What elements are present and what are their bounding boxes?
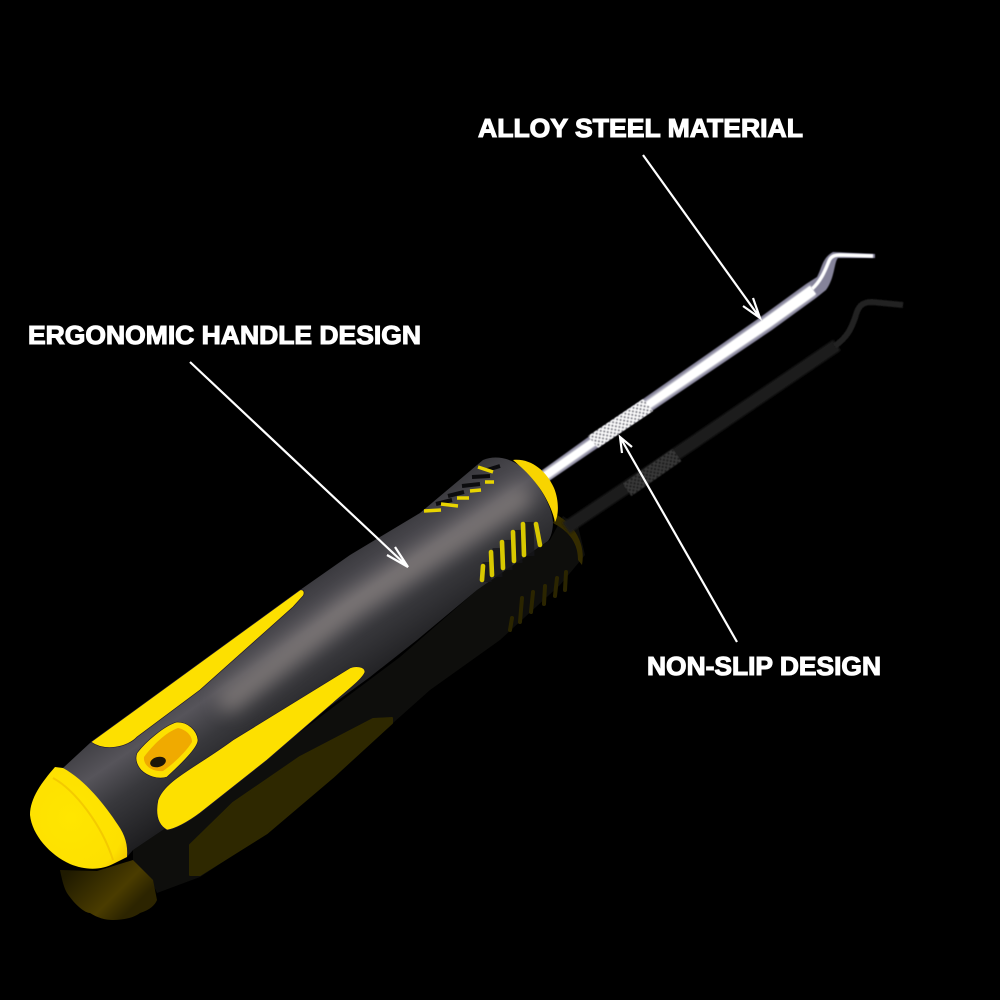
hanging hole bbox=[136, 722, 198, 778]
screwdriver handle bbox=[30, 458, 558, 869]
reflected shaft bbox=[566, 345, 837, 528]
reflected end cap bbox=[60, 860, 157, 920]
arrow: to steel shaft bbox=[643, 155, 760, 318]
reflected handle bbox=[133, 516, 585, 893]
reflected hook bbox=[835, 302, 903, 346]
reflected yellow strip bbox=[190, 718, 392, 875]
steel shaft with hook bbox=[541, 252, 875, 481]
cap rim shading bbox=[53, 778, 113, 860]
upper grip stripes bbox=[424, 467, 494, 511]
label: non-slip design: NON-SLIP DESIGN bbox=[647, 651, 881, 681]
lower yellow strip bbox=[157, 667, 365, 830]
shaft edge bbox=[541, 252, 875, 481]
knurled grip bbox=[588, 399, 653, 448]
hook tip bbox=[812, 255, 873, 289]
body highlight bbox=[230, 498, 520, 700]
reflected grip stripes bbox=[510, 572, 566, 630]
lower grip stripes bbox=[482, 524, 540, 580]
arrow: to handle bbox=[190, 362, 408, 567]
label: ergonomic handle design: ERGONOMIC HANDLE DESIGN bbox=[28, 320, 421, 350]
reflected collar bbox=[553, 515, 583, 565]
rear collar bbox=[513, 460, 558, 522]
upper yellow strip bbox=[91, 590, 304, 747]
handle body bbox=[63, 458, 553, 857]
reflected knurl bbox=[627, 455, 677, 490]
lower grip grooves bbox=[487, 522, 530, 582]
label: alloy steel material: ALLOY STEEL MATERIAL bbox=[478, 113, 803, 143]
end cap bbox=[30, 767, 127, 869]
shaft highlight bbox=[543, 286, 816, 479]
shaft sheen bbox=[542, 285, 816, 480]
dark grooves bbox=[436, 466, 500, 504]
reflection of the tool bbox=[60, 302, 903, 920]
arrow: to knurled grip bbox=[620, 437, 737, 642]
